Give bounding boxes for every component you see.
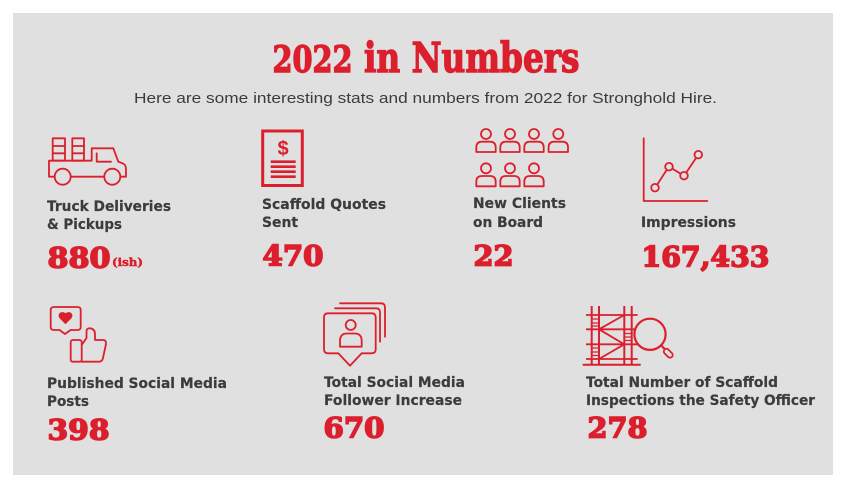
label: on Board — [473, 215, 543, 231]
subtitle: Here are some interesting stats and numbers from 2022 for Stronghold Hire. — [134, 90, 717, 107]
value: 167,433 — [642, 240, 770, 274]
stat: new clients — [473, 129, 568, 272]
label: Impressions — [641, 215, 736, 231]
stat: scaffold inspections — [583, 306, 815, 444]
icon: quote document — [263, 131, 302, 186]
label: Sent — [262, 215, 298, 231]
title: 2022 in Numbers — [272, 34, 580, 82]
label: Follower Increase — [324, 393, 462, 409]
icon: speech heart and thumbs up — [51, 307, 106, 362]
value: 670 — [324, 412, 384, 444]
label: Posts — [47, 394, 89, 410]
stat: scaffold quotes — [262, 131, 386, 272]
value suffix: (ish) — [112, 256, 143, 269]
value: 22 — [474, 240, 514, 272]
value: 278 — [588, 412, 648, 444]
label: Total Social Media — [324, 375, 465, 391]
label: Inspections the Safety Officer — [586, 393, 815, 409]
label: & Pickups — [47, 217, 122, 233]
stat: truck deliveries — [47, 138, 171, 274]
icon: line chart — [644, 138, 707, 201]
stat: social media posts — [47, 307, 227, 446]
icon: follower cards — [324, 303, 385, 366]
value: 398 — [48, 414, 110, 446]
icon: scaffold and magnifier — [583, 306, 670, 365]
value: 880 — [48, 242, 110, 274]
label: Truck Deliveries — [47, 199, 171, 215]
label: Scaffold Quotes — [262, 197, 386, 213]
stat: follower increase — [324, 303, 465, 444]
value: 470 — [262, 240, 324, 272]
label: Total Number of Scaffold — [586, 375, 778, 391]
label: New Clients — [473, 196, 566, 212]
icon: truck — [49, 138, 126, 185]
stat: impressions — [641, 138, 770, 274]
label: Published Social Media — [47, 376, 227, 392]
icon: quote document: $ — [277, 138, 289, 160]
icon: clients group — [476, 129, 568, 186]
